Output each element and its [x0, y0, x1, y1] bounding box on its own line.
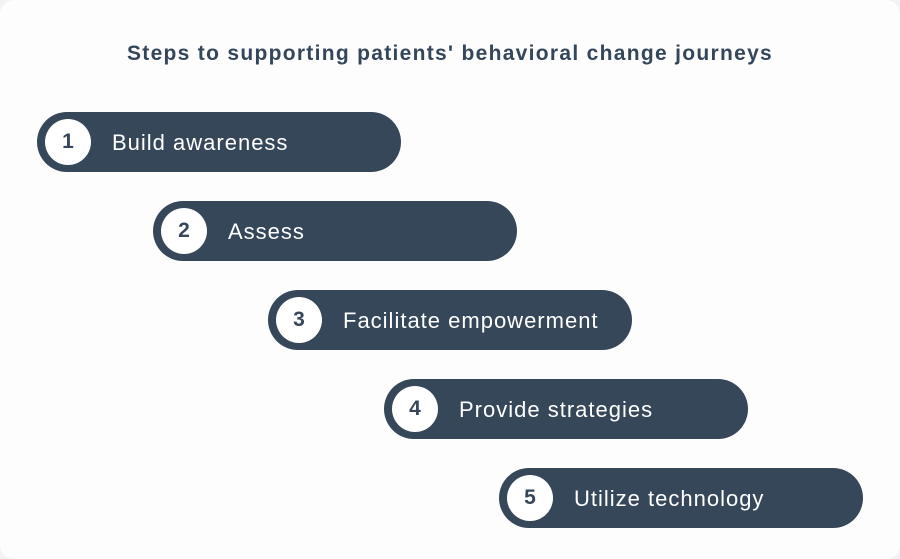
step 2 — [153, 201, 517, 261]
step 1 — [37, 112, 401, 172]
step 3: 3 — [293, 308, 305, 331]
step 3 — [268, 290, 632, 350]
step 1: 1 — [62, 130, 74, 153]
step 2: Assess — [228, 219, 305, 244]
step 5: Utilize technology — [574, 486, 764, 511]
step 4: 4 — [409, 397, 421, 420]
step 1: Build awareness — [112, 130, 288, 155]
step 4: Provide strategies — [459, 397, 653, 422]
step 5 — [499, 468, 863, 528]
step 2: 2 — [178, 219, 190, 242]
title: Steps to supporting patients' behavioral change journeys — [127, 42, 773, 65]
step 3: Facilitate empowerment — [343, 308, 599, 333]
step 4 — [384, 379, 748, 439]
step 5: 5 — [524, 486, 536, 509]
